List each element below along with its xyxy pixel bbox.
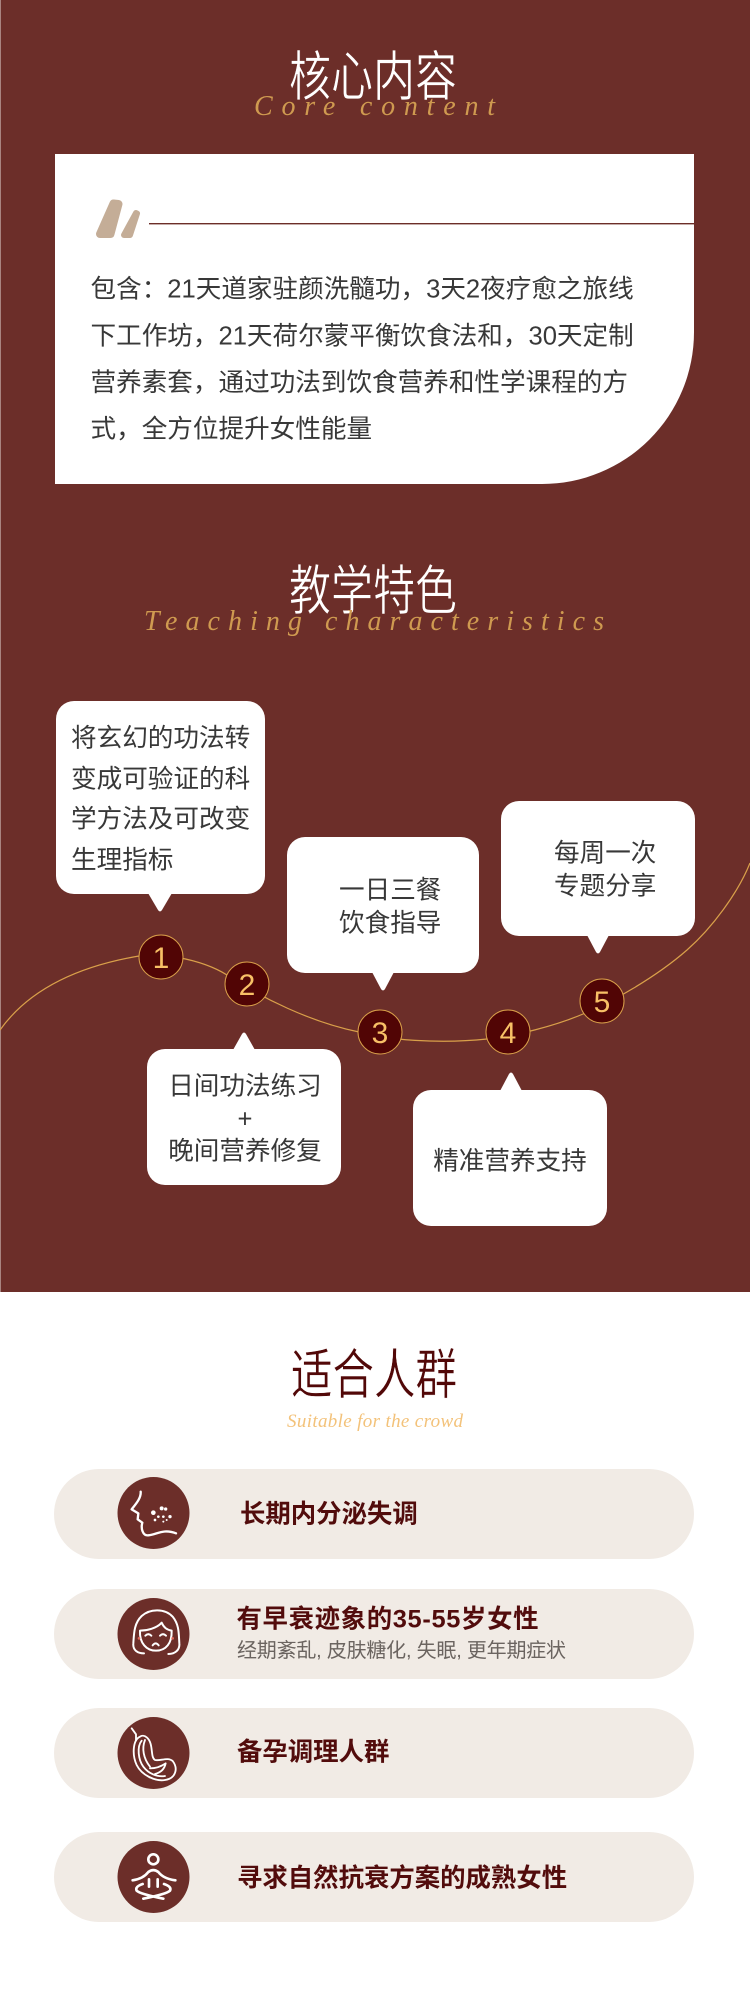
callout: step 3: 一日三餐: [339, 876, 441, 904]
text block: core content description: [90, 274, 634, 444]
callout: step 2: 晚间营养修复: [168, 1136, 322, 1166]
heading: suitable for the crowd: 适合人群: [291, 1346, 457, 1406]
timeline marker 1: 1: [153, 942, 169, 975]
panel: audience row 1: 长期内分泌失调: [240, 1500, 418, 1528]
heading: suitable for the crowd: [287, 1346, 464, 1432]
heading: core content: Core content: [254, 91, 496, 122]
text block: core content description: 式，全方位提升女性能量: [90, 414, 372, 444]
callout: step 3: 饮食指导: [339, 908, 441, 938]
timeline marker 5: [580, 979, 624, 1023]
panel: audience row 2: [54, 1589, 694, 1679]
icon: quote marks: [100, 204, 137, 235]
panel: audience row 2: 有早衰迹象的35-55岁女性: [236, 1606, 538, 1634]
timeline marker 2: 2: [239, 969, 255, 1002]
callout: step 2: [147, 1032, 341, 1185]
callout: step 1: [56, 701, 265, 912]
icon: face profile with spots: [132, 1492, 176, 1535]
panel: dark red background: [0, 0, 750, 1292]
panel: audience row 3: [54, 1708, 694, 1798]
callout: step 4: [413, 1072, 607, 1226]
callout: step 5: 专题分享: [554, 872, 656, 900]
callout: step 1: 生理指标: [71, 846, 173, 874]
callout: step 1: 变成可验证的科: [71, 764, 250, 794]
heading: teaching characteristics: [144, 562, 604, 637]
icon: uterus: [132, 1728, 176, 1780]
heading: teaching characteristics: 教学特色: [289, 562, 457, 622]
timeline marker 4: [486, 1010, 530, 1054]
heading: teaching characteristics: Teaching characteristics: [144, 606, 604, 637]
timeline marker 3: 3: [372, 1017, 388, 1050]
panel: core content card: [55, 154, 694, 484]
text block: core content description: 营养素套，通过功法到饮食营养和性学课程的方: [90, 368, 628, 397]
panel: audience row 4: 寻求自然抗衰方案的成熟女性: [237, 1864, 567, 1892]
timeline marker 5: 5: [594, 986, 610, 1019]
panel: audience row 4: [54, 1832, 694, 1922]
panel: audience row 2: 经期紊乱, 皮肤糖化, 失眠, 更年期症状: [237, 1639, 566, 1662]
timeline marker 3: [358, 1010, 402, 1054]
panel: audience row 1: [54, 1469, 694, 1559]
panel: audience row 3: 备孕调理人群: [237, 1738, 389, 1766]
callout: step 5: [501, 801, 695, 954]
callout: step 5: 每周一次: [554, 838, 656, 868]
icon: woman's face: [133, 1610, 179, 1654]
callout: step 3: [287, 837, 479, 990]
callout: step 1: 将玄幻的功法转: [71, 724, 250, 752]
callout: step 1: 学方法及可改变: [71, 804, 250, 834]
text block: core content description: 包含：21天道家驻颜洗髓功，3天2夜疗愈之旅线: [90, 274, 634, 304]
heading: core content: [254, 48, 496, 122]
timeline marker 1: [139, 935, 183, 979]
text block: core content description: 下工作坊，21天荷尔蒙平衡饮食法和，30天定制: [90, 322, 634, 350]
timeline marker 2: [225, 962, 269, 1006]
callout: step 4: 精准营养支持: [433, 1146, 587, 1176]
callout: step 2: 日间功法练习: [168, 1072, 322, 1100]
timeline marker 4: 4: [500, 1017, 516, 1050]
heading: suitable for the crowd: Suitable for the crowd: [287, 1411, 464, 1432]
callout: step 2: +: [238, 1106, 252, 1134]
chart: timeline curve: [0, 863, 750, 1041]
heading: core content: 核心内容: [289, 48, 457, 108]
icon: meditating person: [133, 1854, 175, 1899]
